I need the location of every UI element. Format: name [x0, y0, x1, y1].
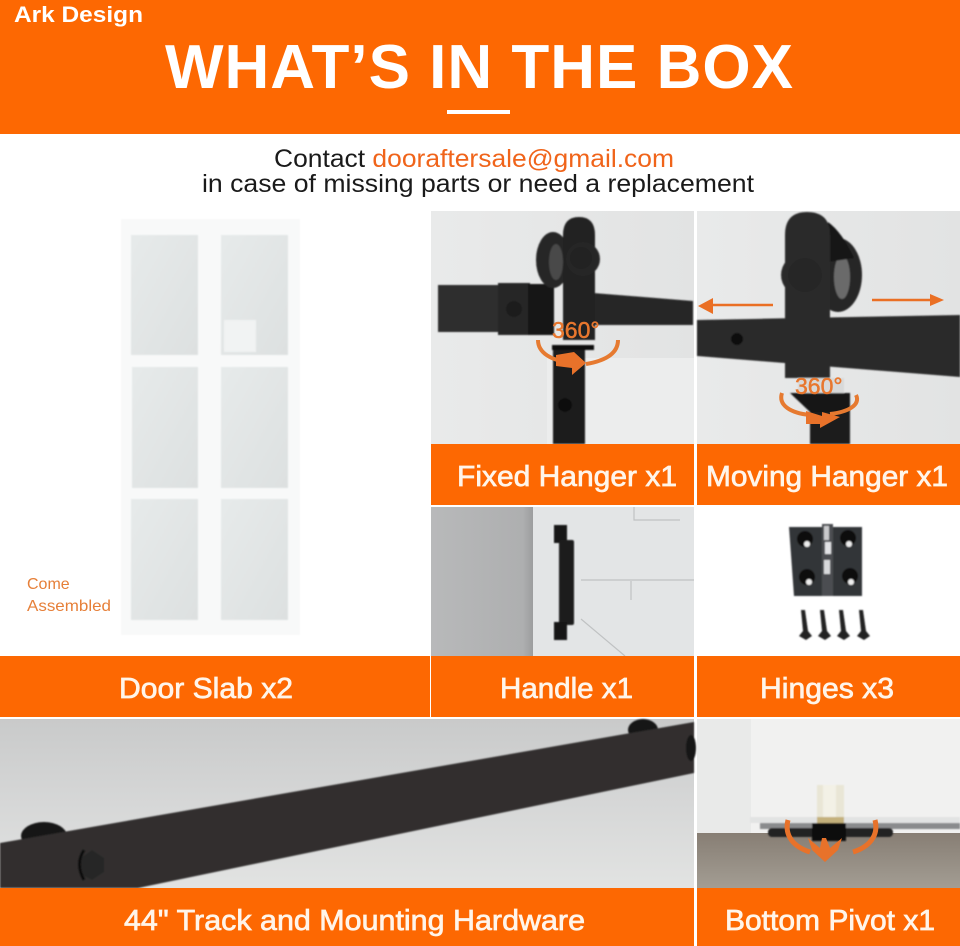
label: handle	[431, 656, 694, 717]
handle icon	[554, 525, 574, 640]
contact note	[202, 145, 754, 198]
brand logo text: Ark Design	[14, 2, 143, 27]
panel: door slab	[0, 219, 430, 717]
pivot hardware	[750, 785, 960, 841]
label: bottom pivot: Bottom Pivot x1	[725, 905, 935, 937]
360 rotation mark: 360°	[795, 373, 843, 399]
label: door slab	[0, 656, 430, 717]
label: fixed hanger: Fixed Hanger x1	[457, 461, 677, 493]
label: bottom pivot	[697, 888, 960, 946]
label: moving hanger	[697, 444, 960, 505]
track rail	[0, 719, 696, 888]
label: track: 44" Track and Mounting Hardware	[124, 905, 585, 937]
panel: bottom pivot	[697, 719, 960, 946]
360 rotation mark	[781, 373, 857, 428]
label: track	[0, 888, 694, 946]
panel: moving hanger	[697, 211, 960, 505]
label: handle: Handle x1	[500, 673, 633, 705]
label: door slab: Door Slab x2	[119, 673, 293, 705]
label: moving hanger: Moving Hanger x1	[706, 461, 948, 493]
panel: handle	[431, 507, 694, 717]
come assembled note: Come	[27, 576, 70, 593]
fixed hanger hardware	[438, 217, 693, 444]
label: hinges: Hinges x3	[760, 673, 894, 705]
panel: track	[0, 719, 696, 946]
header banner	[0, 0, 960, 134]
door illustration	[121, 219, 300, 635]
360 rotation mark	[538, 317, 618, 375]
panel: hinges	[697, 507, 960, 717]
360 rotation mark: 360°	[552, 317, 600, 343]
contact note: in case of missing parts or need a replacement	[202, 170, 754, 198]
direction arrows	[698, 294, 944, 314]
rotation arrows	[787, 820, 876, 862]
title underline	[447, 110, 510, 114]
come assembled note	[27, 576, 111, 615]
panel: fixed hanger	[431, 211, 694, 505]
screws icon	[799, 610, 870, 640]
hinge icon	[789, 524, 862, 596]
moving hanger hardware	[697, 212, 960, 444]
title: WHAT’S IN THE BOX	[165, 33, 793, 102]
come assembled note: Assembled	[27, 598, 111, 615]
contact note: Contact dooraftersale@gmail.com	[274, 145, 674, 173]
label: hinges	[697, 656, 960, 717]
label: fixed hanger	[431, 444, 694, 505]
